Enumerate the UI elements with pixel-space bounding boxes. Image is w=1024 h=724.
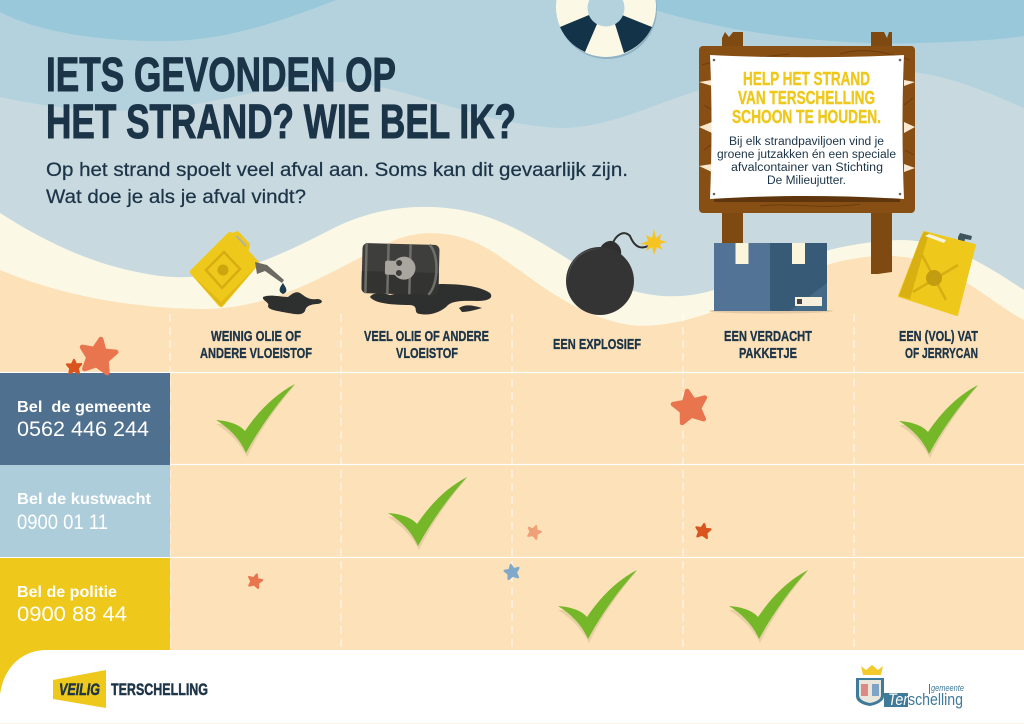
wooden sign [699,32,915,274]
icon: suspicious parcel [709,243,833,314]
label: jerrycan: EEN (VOL) VAT [899,328,978,345]
logo: Veilig Terschelling: VEILIG [59,680,100,699]
label: weinig olie [200,328,312,362]
sign board [699,46,915,213]
logo: Veilig Terschelling: TERSCHELLING [111,680,208,699]
icon: oil barrel with skull [361,243,491,315]
poster body text: afvalcontainer van Stichting [731,162,883,174]
shield [856,678,884,706]
column labels [200,328,978,362]
row: kustwacht [0,465,170,557]
row: kustwacht: 0900 01 11 [17,511,108,534]
icon: yellow jerrycan pouring oil [193,231,322,314]
label: jerrycan [899,328,978,362]
intro text: Wat doe je als je afval vindt? [46,186,306,208]
logo: gemeente Terschelling: schelling [908,690,963,709]
icon: bomb [566,229,667,315]
label: pakketje: PAKKETJE [739,345,797,362]
poster body text: groene jutzakken én een speciale [717,149,896,161]
title [46,49,516,149]
starfish decorations [67,336,711,589]
footer [0,650,1024,724]
row: politie [0,558,170,650]
label: pakketje: EEN VERDACHT [724,328,812,345]
sign posts [722,32,892,274]
label: weinig olie: WEINIG OLIE OF [211,328,301,345]
label: explosief: EEN EXPLOSIEF [553,336,641,353]
label: weinig olie: ANDERE VLOEISTOF [200,345,312,362]
crown [861,665,883,675]
icon: yellow jerrycan with skull [899,232,975,315]
row: kustwacht: Bel de kustwacht [17,491,151,508]
label: veel olie: VLOEISTOF [396,345,458,362]
row: politie: Bel de politie [17,584,117,601]
label: pakketje [724,328,812,362]
poster heading: HELP HET STRAND [743,69,870,89]
intro text: Op het strand spoelt veel afval aan. Soms kan dit gevaarlijk zijn. [46,159,628,181]
logo: gemeente Terschelling [856,665,964,709]
poster body text: Bij elk strandpaviljoen vind je [729,136,884,148]
label: veel olie [364,328,489,362]
label: jerrycan: OF JERRYCAN [905,345,978,362]
poster paper [710,55,904,199]
poster body text: De Milieujutter. [767,175,846,187]
row: politie: 0900 88 44 [17,603,127,626]
logo: Veilig Terschelling [53,670,208,708]
title: HET STRAND? WIE BEL IK? [46,96,516,149]
poster heading: SCHOON TE HOUDEN. [732,107,881,127]
row: gemeente [0,373,170,465]
poster body text [717,136,896,187]
table grid [0,314,1024,650]
label: veel olie: VEEL OLIE OF ANDERE [364,328,489,345]
check marks [216,384,978,643]
intro text [46,159,628,208]
logo: gemeente Terschelling: Ter [888,690,909,709]
logo: gemeente Terschelling: gemeente [931,683,964,694]
title: IETS GEVONDEN OP [46,49,396,102]
row: gemeente: 0562 446 244 [17,418,149,441]
lifebuoy [556,0,657,59]
poster heading [732,69,881,127]
poster heading: VAN TERSCHELLING [738,88,875,108]
row: gemeente: Bel de gemeente [17,399,151,416]
